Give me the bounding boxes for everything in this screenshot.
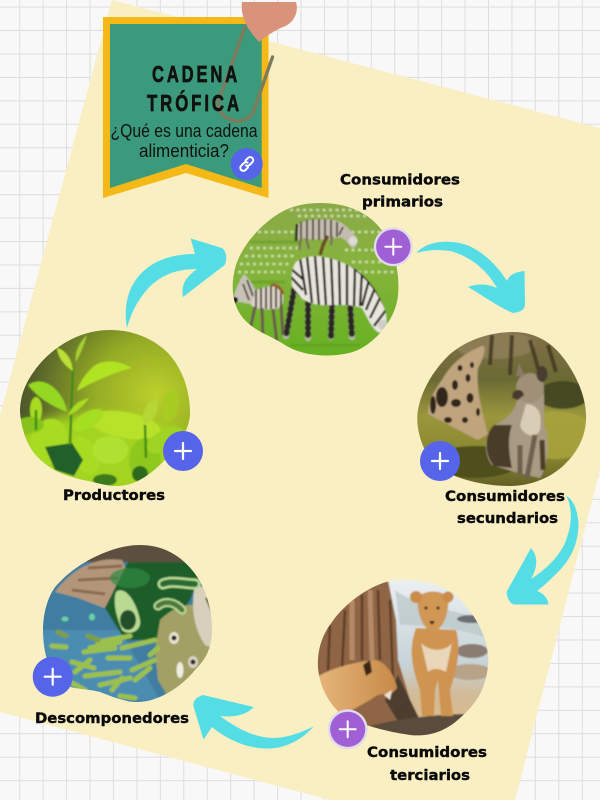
right hyena [486, 392, 548, 478]
upper leaves [57, 348, 73, 371]
holes [169, 632, 179, 644]
label: consumidores terciarios: terciarios [390, 768, 470, 784]
lying lioness [316, 660, 397, 714]
top zebra [298, 219, 357, 248]
label: consumidores secundarios [445, 489, 565, 527]
subtitle text [110, 121, 258, 161]
foal [249, 286, 283, 309]
photo: hyenas [417, 332, 586, 486]
arrow: productores to primarios [126, 238, 226, 328]
stems [36, 365, 146, 458]
photo: zebras [232, 203, 398, 356]
title text: CADENA [152, 62, 240, 88]
subtitle text: alimenticia? [139, 141, 229, 161]
label: consumidores terciarios: Consumidores [367, 745, 487, 761]
title text [147, 62, 242, 117]
label: consumidores secundarios: secundarios [457, 511, 558, 527]
button: plus descomponedores [33, 657, 73, 697]
subtitle text: ¿Qué es una cadena [110, 121, 258, 141]
title text: TRÓFICA [147, 89, 242, 117]
foreground leaves [20, 390, 182, 475]
left hyena [428, 346, 488, 440]
banner ribbon [103, 17, 268, 198]
arrow: primarios to secundarios [416, 242, 525, 313]
label: consumidores primarios: primarios [362, 194, 443, 210]
bean cell [115, 590, 140, 633]
green rods [52, 632, 158, 698]
button: plus secundarios [420, 441, 460, 481]
label: productores: Productores [63, 488, 165, 504]
photo: decomposers [43, 545, 212, 702]
arrow: secundarios to terciarios [506, 496, 578, 604]
bacterial mat [55, 559, 132, 608]
paperclip [218, 27, 272, 121]
title banner [103, 2, 297, 198]
arrow: terciarios to descomponedores [193, 695, 314, 749]
label: consumidores terciarios [367, 745, 487, 784]
button: plus primarios [374, 227, 413, 266]
big zebra body [292, 256, 386, 333]
standing lioness [412, 628, 458, 716]
big zebra legs [286, 290, 352, 338]
link button [231, 148, 263, 180]
tubes [163, 582, 195, 584]
label: consumidores primarios: Consumidores [340, 172, 460, 188]
photo: lionesses [318, 580, 488, 736]
label: descomponedores: Descomponedores [35, 711, 189, 727]
photo: plant leaves [20, 330, 190, 486]
green core [105, 562, 205, 640]
heart pin [242, 2, 297, 42]
tail stub [320, 236, 328, 255]
label: consumidores primarios [340, 172, 460, 210]
label: consumidores secundarios: Consumidores [445, 489, 565, 505]
button: plus productores [163, 431, 203, 471]
dark patches [45, 443, 83, 476]
button: plus terciarios [328, 709, 368, 749]
tan cell [154, 604, 210, 694]
trunk [318, 582, 410, 726]
rock [370, 713, 465, 736]
